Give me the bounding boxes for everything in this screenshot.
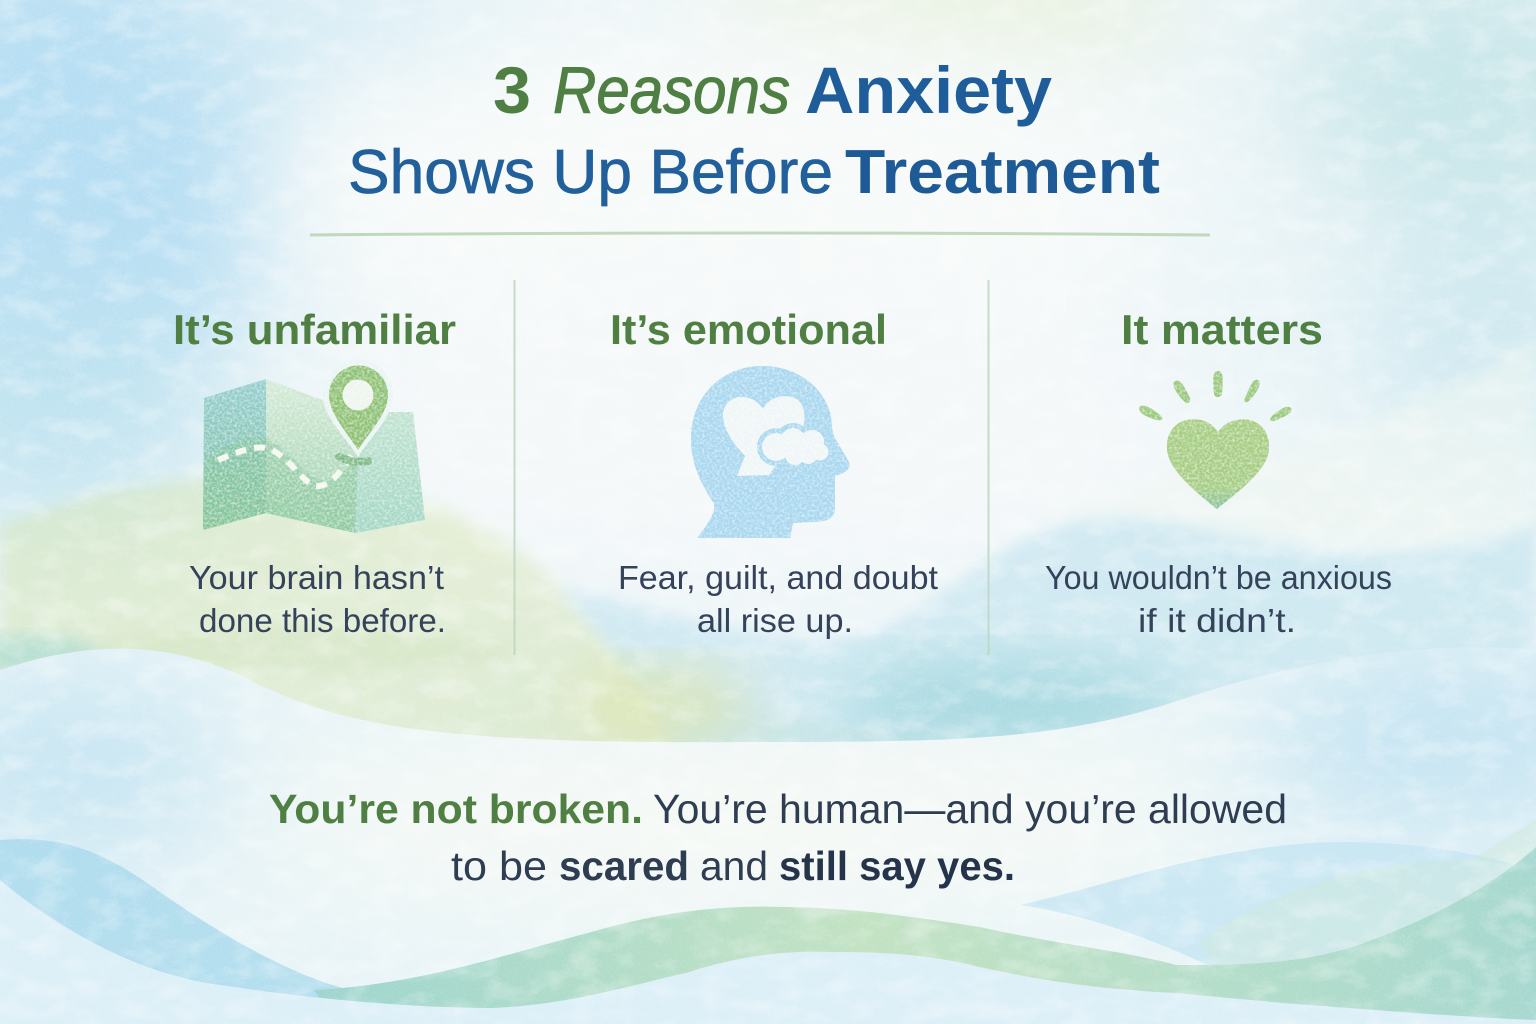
title line 1: 3 bbox=[493, 53, 531, 127]
description: all rise up. bbox=[697, 602, 853, 639]
description: Fear, guilt, and doubt bbox=[618, 559, 938, 596]
glow rays bbox=[1139, 371, 1291, 421]
title line 2 bbox=[348, 138, 1160, 207]
panel: it's emotional bbox=[610, 306, 938, 639]
bottom pale wave bbox=[0, 880, 1536, 1024]
icon: head with heart and cloud bbox=[691, 366, 850, 538]
right blue wave bbox=[1020, 842, 1514, 965]
lower-left blue wave bbox=[0, 839, 342, 998]
closing message bbox=[269, 786, 1287, 889]
teal pool behind wave bbox=[840, 661, 1180, 749]
column divider right bbox=[988, 280, 990, 655]
closing message: scared bbox=[559, 843, 689, 889]
closing message: You’re not broken. bbox=[269, 786, 643, 832]
column divider left bbox=[514, 280, 516, 655]
title bbox=[348, 53, 1160, 207]
description bbox=[1045, 559, 1392, 639]
title divider bbox=[310, 233, 1210, 235]
title line 2: Treatment bbox=[845, 138, 1160, 207]
icon: folded map with pin bbox=[203, 360, 425, 533]
title line 1: Reasons bbox=[553, 53, 790, 127]
panel: it's unfamiliar bbox=[173, 306, 456, 639]
icon: glowing heart bbox=[1139, 371, 1291, 509]
wave: blue right bbox=[560, 515, 1536, 800]
hill: yellow-green left bbox=[0, 477, 960, 800]
description bbox=[189, 559, 446, 639]
description: done this before. bbox=[199, 602, 446, 639]
description: Your brain hasn’t bbox=[189, 559, 444, 596]
title line 1 bbox=[493, 53, 1052, 127]
title line 2: Shows Up Before bbox=[348, 138, 833, 207]
green band bbox=[314, 847, 1536, 1024]
description: if it didn’t. bbox=[1138, 602, 1296, 639]
closing message: and bbox=[700, 843, 768, 889]
closing message: still say yes. bbox=[779, 843, 1015, 889]
lower white wave band bbox=[0, 647, 1536, 1024]
closing message: to be bbox=[451, 843, 547, 889]
closing message: You’re human—and you’re allowed bbox=[653, 786, 1287, 832]
heading: It’s unfamiliar bbox=[173, 306, 456, 353]
title line 1: Anxiety bbox=[805, 53, 1052, 127]
heading: It matters bbox=[1121, 306, 1323, 353]
panel: it matters bbox=[1045, 306, 1392, 639]
description bbox=[618, 559, 938, 639]
heading: It’s emotional bbox=[610, 306, 887, 353]
description: You wouldn’t be anxious bbox=[1045, 559, 1392, 596]
